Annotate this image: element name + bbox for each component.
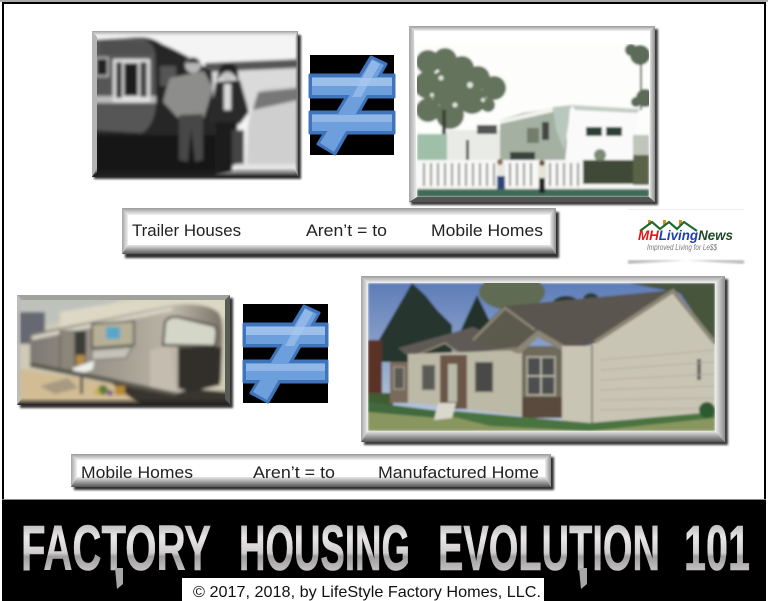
- logo: MHLivingNews: Improved Living for Le$$: [647, 243, 717, 252]
- label: Mobile Homes: Mobile Homes: [431, 221, 543, 240]
- title: Factory Housing Evolution 101: FACTORY: [21, 512, 211, 584]
- logo: MHLivingNews: [628, 209, 744, 264]
- title: Factory Housing Evolution 101: [21, 512, 750, 589]
- label: Trailer Houses: Trailer Houses: [132, 221, 241, 240]
- label: Aren't = to: Aren’t = to: [306, 221, 387, 240]
- label: Manufactured Home: Manufactured Home: [378, 463, 539, 482]
- logo: MHLivingNews: MHLivingNews: [638, 227, 733, 243]
- photo: 1950s mobile home with picket fence: [409, 26, 658, 205]
- photo: couple beside vintage trailer: [92, 31, 301, 179]
- label: Mobile Homes: Mobile Homes: [81, 463, 193, 482]
- photo: silver vintage trailer in museum: [17, 295, 233, 408]
- title band: [2, 499, 766, 601]
- text bar: trailer houses aren't equal to mobile homes: [122, 208, 559, 258]
- label: Aren't = to: Aren’t = to: [253, 463, 335, 482]
- text bar: mobile homes aren't equal to manufactured home: [71, 454, 554, 490]
- copyright notice: © 2017, 2018, by LifeStyle Factory Homes, LLC.: [193, 584, 541, 601]
- icon: not equal sign 1: [310, 55, 394, 155]
- photo: modern manufactured home: [361, 274, 728, 445]
- title: Factory Housing Evolution 101: HOUSING: [239, 512, 410, 584]
- icon: not equal sign 2: [243, 304, 328, 403]
